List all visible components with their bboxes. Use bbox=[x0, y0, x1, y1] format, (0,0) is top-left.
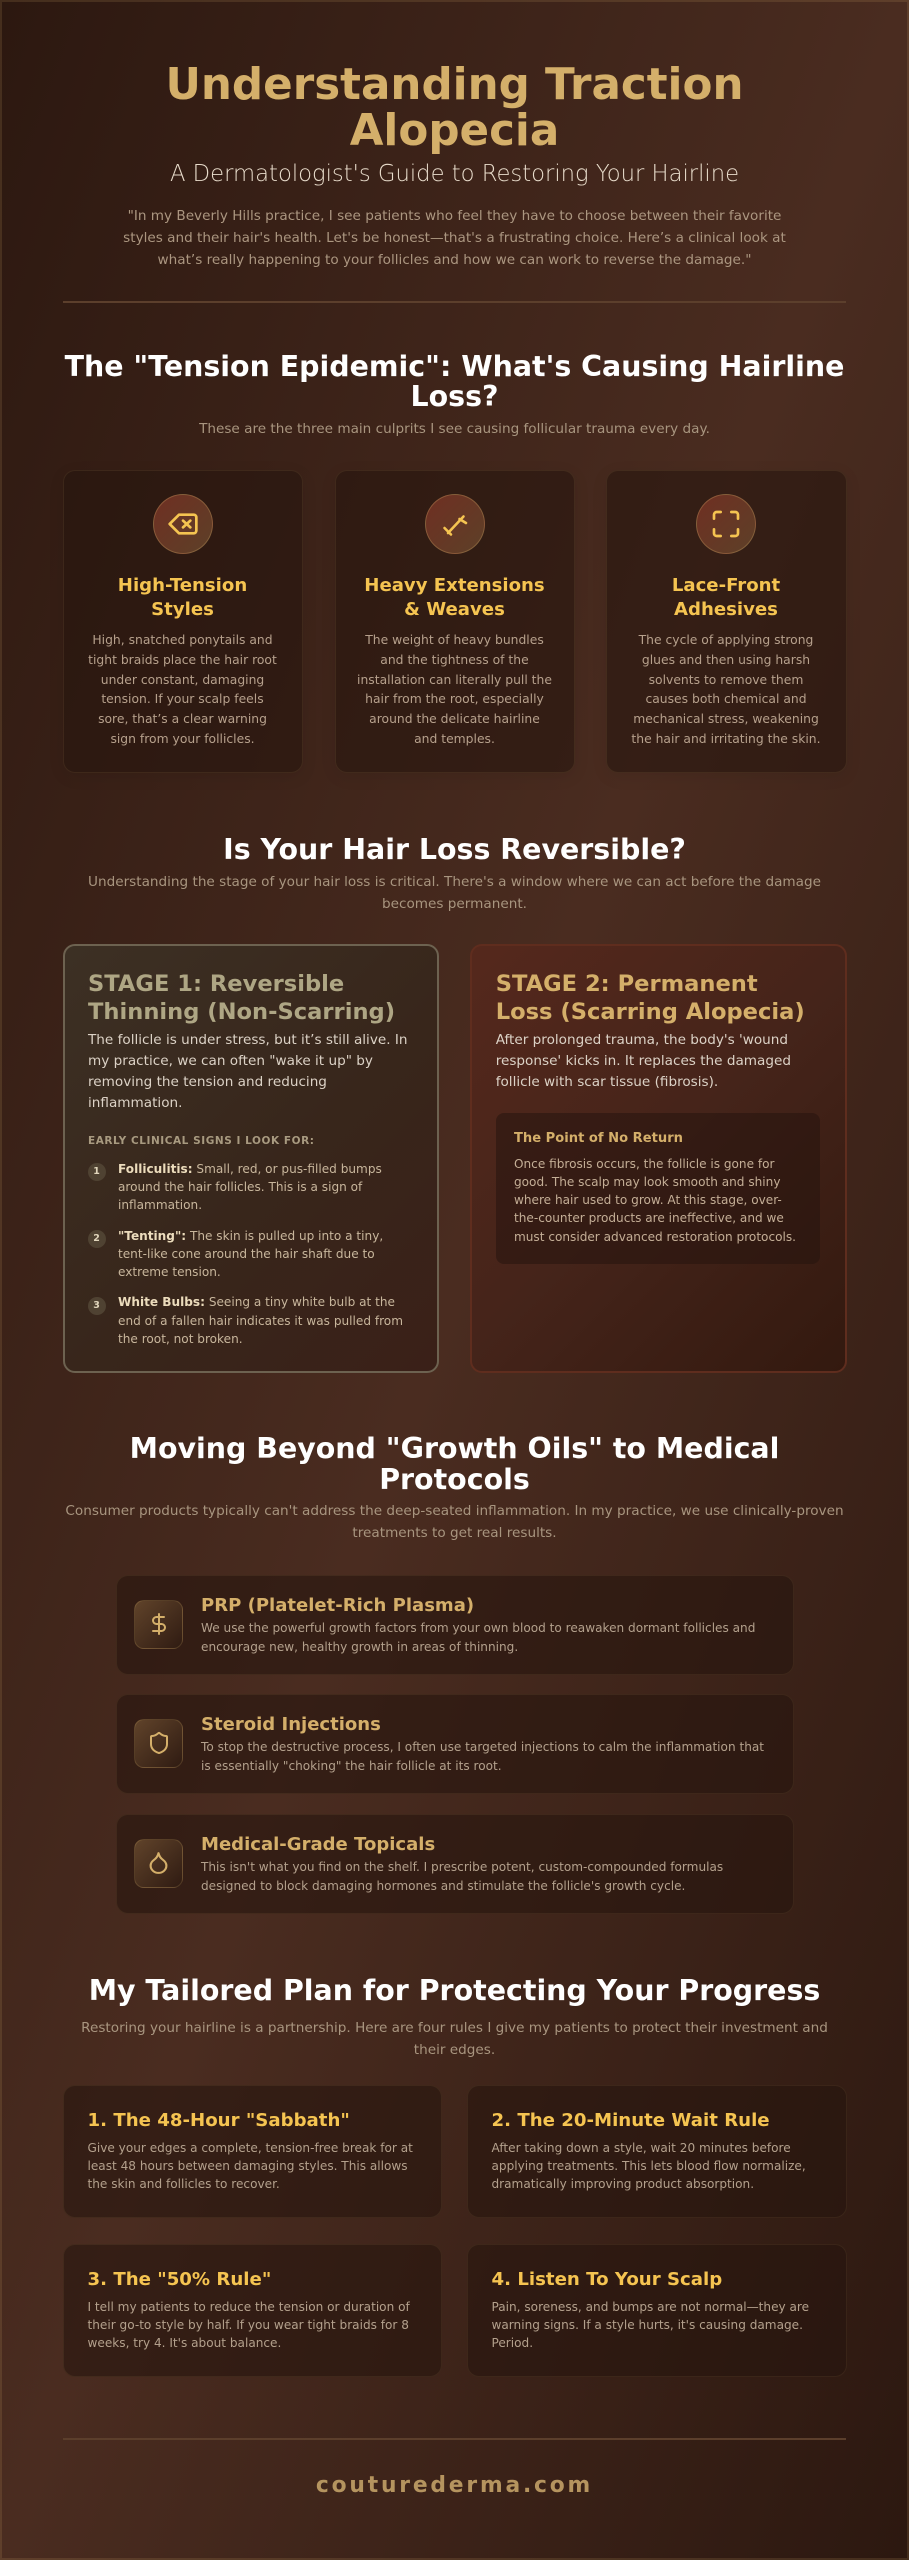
rule text: least 48 hours between damaging styles. This allows bbox=[88, 2159, 408, 2173]
section intro: clinically proven treatments: treatments to get real results. bbox=[352, 1525, 557, 1541]
card text: glues and then using harsh bbox=[642, 653, 810, 667]
sign: folliculitis: around the hair follicles. This is a sign of bbox=[118, 1180, 362, 1194]
section heading: tension epidemic bbox=[64, 350, 844, 413]
stage 2 heading: Loss (Scarring Alopecia) bbox=[496, 999, 805, 1025]
panel: PRP bbox=[116, 1574, 794, 1674]
badge 3 bbox=[88, 1297, 106, 1315]
section heading: medical protocols bbox=[130, 1432, 779, 1496]
sign: folliculitis bbox=[118, 1162, 382, 1212]
intro quote bbox=[123, 208, 786, 268]
card text: and temples. bbox=[414, 732, 495, 746]
stage 1 description: The follicle is under stress, but it’s still alive. In bbox=[88, 1032, 408, 1048]
stage 1 heading bbox=[88, 971, 395, 1025]
callout text: Once fibrosis occurs, the follicle is gone for bbox=[514, 1157, 775, 1171]
sign: white bulbs bbox=[118, 1295, 403, 1346]
card heading bbox=[364, 575, 545, 620]
card text: and the tightness of the bbox=[380, 653, 529, 667]
subtitle: A Dermatologist's Guide to Restoring Your Hairline bbox=[170, 160, 739, 186]
stage 2 description: follicle with scar tissue (fibrosis). bbox=[496, 1074, 718, 1090]
stage 2 description: response' kicks in. It replaces the damaged bbox=[496, 1053, 791, 1069]
card heading: Adhesives bbox=[674, 599, 778, 620]
header bbox=[123, 60, 786, 268]
stage 1 description bbox=[88, 1032, 408, 1111]
treatment text: encourage new, healthy growth in areas of thinning. bbox=[201, 1640, 518, 1654]
section intro: window to act: Understanding the stage of your hair loss is critical. There's a window where we can act before the damage bbox=[88, 874, 821, 890]
panel: high-tension styles bbox=[62, 470, 303, 773]
section intro: clinically proven treatments: Consumer products typically can't address the deep-seated inflammation. In my practice, we use clinically-proven bbox=[65, 1503, 844, 1519]
rule text: After taking down a style, wait 20 minutes before bbox=[492, 2141, 791, 2155]
treatment text: This isn't what you find on the shelf. I prescribe potent, custom-compounded formulas bbox=[201, 1860, 723, 1874]
panel: lace-front adhesives bbox=[606, 470, 846, 773]
card text: causes both chemical and bbox=[645, 692, 807, 706]
sign: tenting: extreme tension. bbox=[118, 1265, 221, 1279]
section heading: tension epidemic: The "Tension Epidemic": What's Causing Hairline bbox=[65, 350, 844, 382]
icon: dollar bbox=[134, 1600, 183, 1648]
treatment text bbox=[200, 1740, 764, 1773]
section intro: window to act bbox=[88, 874, 821, 912]
intro quote: what’s really happening to your follicles and how we can work to reverse the damage." bbox=[158, 252, 752, 268]
card text bbox=[357, 633, 552, 746]
card text: The cycle of applying strong bbox=[639, 633, 813, 647]
section intro: clinically proven treatments bbox=[65, 1503, 844, 1541]
card text bbox=[631, 633, 821, 746]
card heading: & Weaves bbox=[404, 599, 505, 620]
icon: weight bbox=[424, 494, 484, 554]
rule heading: 1. The 48-Hour "Sabbath" bbox=[88, 2110, 350, 2131]
stage 1 description: my practice, we can often "wake it up" by bbox=[88, 1053, 373, 1069]
card text: The weight of heavy bundles bbox=[365, 633, 544, 647]
card text: under constant, damaging bbox=[101, 672, 264, 686]
sign: white bulbs: the root, not broken. bbox=[118, 1332, 243, 1346]
card text: solvents to remove them bbox=[649, 672, 803, 686]
badge 1 bbox=[88, 1163, 106, 1181]
rule text bbox=[88, 2141, 413, 2191]
icon: delete tag bbox=[152, 494, 212, 554]
stage 1 description: removing the tension and reducing bbox=[88, 1074, 327, 1090]
card heading: High-Tension bbox=[118, 575, 247, 596]
rule text: Period. bbox=[492, 2336, 533, 2350]
card text: hair from the root, especially bbox=[365, 692, 544, 706]
card text: the hair and irritating the skin. bbox=[631, 732, 821, 746]
sign: tenting bbox=[118, 1229, 383, 1279]
treatment text: We use the powerful growth factors from your own blood to reawaken dormant follicles and bbox=[201, 1621, 755, 1635]
card text: tight braids place the hair root bbox=[88, 653, 277, 667]
rule text: Give your edges a complete, tension-free break for at bbox=[88, 2141, 413, 2155]
panel: medical-grade topicals bbox=[116, 1814, 794, 1914]
section heading: tailored plan: My Tailored Plan for Protecting Your Progress bbox=[89, 1974, 820, 2007]
section heading: medical protocols: Moving Beyond "Growth Oils" to Medical bbox=[130, 1432, 779, 1465]
footer: website: couturederma.com bbox=[316, 2472, 593, 2498]
title bbox=[166, 60, 743, 156]
card text bbox=[88, 633, 277, 746]
card text: tension. If your scalp feels bbox=[101, 692, 264, 706]
callout text bbox=[514, 1157, 796, 1244]
treatment text bbox=[200, 1860, 723, 1893]
treatment name: PRP (Platelet-Rich Plasma) bbox=[201, 1594, 474, 1616]
callout text: must consider advanced restoration protocols. bbox=[514, 1230, 796, 1244]
clinical signs label: EARLY CLINICAL SIGNS I LOOK FOR: bbox=[88, 1135, 314, 1147]
sign: tenting: tent-like cone around the hair shaft due to bbox=[118, 1247, 375, 1261]
rule heading: 3. The "50% Rule" bbox=[88, 2269, 271, 2290]
section heading: reversible: Is Your Hair Loss Reversible? bbox=[223, 833, 686, 866]
callout heading: The Point of No Return bbox=[514, 1131, 683, 1146]
section heading: medical protocols: Protocols bbox=[379, 1462, 530, 1496]
icon: frame corners bbox=[696, 494, 756, 554]
callout text: where hair used to grow. At this stage, over- bbox=[514, 1193, 782, 1207]
panel: rule 3 bbox=[62, 2244, 442, 2377]
card text: High, snatched ponytails and bbox=[92, 633, 273, 647]
panel: stage 2 bbox=[470, 944, 846, 1373]
callout text: the-counter products are ineffective, and we bbox=[514, 1211, 784, 1225]
sign: folliculitis: Folliculitis: Small, red, or pus-filled bumps bbox=[118, 1162, 382, 1176]
section heading: tension epidemic: Loss? bbox=[410, 380, 498, 413]
stage 1 description: inflammation. bbox=[88, 1095, 182, 1111]
section intro: four rules bbox=[81, 2020, 828, 2058]
badge 3: 3 bbox=[93, 1300, 100, 1311]
section intro: window to act: becomes permanent. bbox=[382, 896, 527, 912]
callout text: good. The scalp may look smooth and shiny bbox=[514, 1175, 780, 1189]
card text: around the delicate hairline bbox=[369, 712, 540, 726]
panel: steroid injections bbox=[116, 1694, 794, 1794]
treatment name: Steroid Injections bbox=[201, 1714, 381, 1734]
card text: mechanical stress, weakening bbox=[633, 712, 819, 726]
rule text: their go-to style by half. If you wear tight braids for 8 bbox=[88, 2318, 409, 2332]
title: Understanding Traction bbox=[166, 60, 743, 110]
badge 1: 1 bbox=[93, 1166, 100, 1177]
rule text bbox=[492, 2300, 809, 2350]
treatment text bbox=[201, 1621, 755, 1654]
card heading bbox=[118, 575, 247, 620]
panel: stage 1 bbox=[62, 944, 439, 1373]
callout: point of no return bbox=[496, 1113, 820, 1264]
rule text bbox=[492, 2141, 806, 2191]
card heading: Lace-Front bbox=[672, 575, 780, 596]
rule text: Pain, soreness, and bumps are not normal—they are bbox=[492, 2300, 809, 2314]
icon: droplet bbox=[134, 1838, 183, 1888]
card text: installation can literally pull the bbox=[357, 672, 552, 686]
section intro: four rules: their edges. bbox=[414, 2042, 495, 2058]
panel: rule 4 bbox=[466, 2244, 846, 2377]
treatment text: is essentially "choking" the hair follicle at its root. bbox=[201, 1759, 502, 1773]
rule text: dramatically improving product absorption. bbox=[492, 2177, 754, 2191]
panel: heavy extensions bbox=[334, 470, 575, 773]
section intro: four rules: Restoring your hairline is a partnership. Here are four rules I give my patients to protect their investment and bbox=[81, 2020, 828, 2036]
rule text: weeks, try 4. It's about balance. bbox=[88, 2336, 281, 2350]
sign: white bulbs: end of a fallen hair indicates it was pulled from bbox=[118, 1314, 403, 1328]
sign: white bulbs: White Bulbs: Seeing a tiny white bulb at the bbox=[118, 1295, 395, 1309]
rule heading: 2. The 20-Minute Wait Rule bbox=[492, 2110, 770, 2131]
card heading: Heavy Extensions bbox=[364, 575, 545, 596]
badge 2: 2 bbox=[93, 1233, 100, 1244]
icon: shield bbox=[134, 1718, 183, 1768]
badge 2 bbox=[88, 1230, 106, 1248]
stage 1 heading: Thinning (Non-Scarring) bbox=[88, 999, 395, 1025]
card heading bbox=[672, 575, 780, 620]
intro quote: styles and their hair's health. Let's be honest—that's a frustrating choice. Here’s a clinical look at bbox=[123, 230, 786, 246]
card text: sore, that’s a clear warning bbox=[98, 712, 267, 726]
stage 1 heading: STAGE 1: Reversible bbox=[88, 971, 344, 997]
rule text: applying treatments. This lets blood flow normalize, bbox=[492, 2159, 806, 2173]
rule text: warning signs. If a style hurts, it's causing damage. bbox=[492, 2318, 803, 2332]
rule text bbox=[88, 2300, 410, 2350]
treatment text: designed to block damaging hormones and stimulate the follicle's growth cycle. bbox=[201, 1879, 685, 1893]
stage 2 heading: STAGE 2: Permanent bbox=[496, 971, 758, 997]
intro quote: "In my Beverly Hills practice, I see patients who feel they have to choose between their favorite bbox=[128, 208, 781, 224]
panel: rule 1 bbox=[62, 2085, 442, 2218]
treatment name: Medical-Grade Topicals bbox=[201, 1834, 435, 1854]
rule text: I tell my patients to reduce the tension or duration of bbox=[88, 2300, 410, 2314]
rule text: the skin and follicles to recover. bbox=[88, 2177, 280, 2191]
section intro: three culprits: These are the three main culprits I see causing follicular trauma every day. bbox=[199, 421, 710, 437]
treatment text: To stop the destructive process, I often use targeted injections to calm the inflammation that bbox=[201, 1740, 764, 1754]
rule heading: 4. Listen To Your Scalp bbox=[492, 2269, 722, 2290]
sign: folliculitis: inflammation. bbox=[118, 1198, 202, 1212]
stage 2 heading bbox=[496, 971, 805, 1025]
sign: tenting: "Tenting": The skin is pulled up into a tiny, bbox=[118, 1229, 383, 1243]
card text: sign from your follicles. bbox=[110, 732, 255, 746]
panel: rule 2 bbox=[466, 2085, 846, 2218]
title: Alopecia bbox=[350, 106, 559, 156]
stage 2 description: After prolonged trauma, the body's 'wound bbox=[496, 1032, 788, 1048]
card heading: Styles bbox=[151, 599, 214, 620]
stage 2 description bbox=[496, 1032, 791, 1090]
